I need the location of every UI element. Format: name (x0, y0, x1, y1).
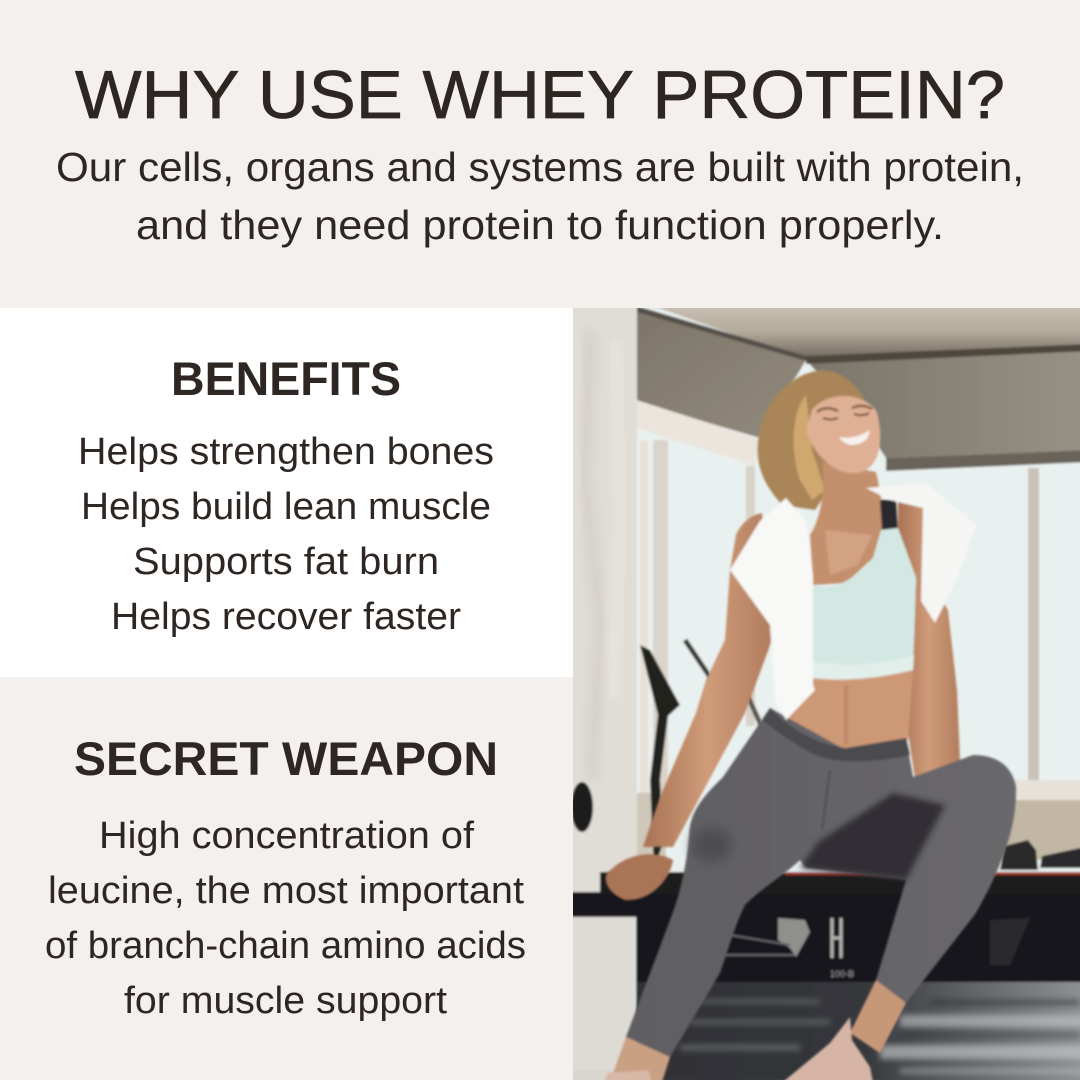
secret weapon description: of branch-chain amino acids (45, 925, 526, 967)
inner thigh shadow (800, 793, 945, 880)
secret weapon description: leucine, the most important (48, 870, 524, 912)
intro text: Our cells, organs and systems are built with protein, (56, 144, 1024, 190)
smile (839, 430, 870, 445)
panel: benefits (0, 308, 573, 677)
hand (606, 854, 673, 900)
waistband (762, 708, 910, 761)
woman (604, 370, 1016, 1080)
sports top (813, 528, 916, 680)
left arm (643, 513, 772, 847)
secret weapon description: for muscle support (124, 980, 447, 1022)
panel: secret weapon (0, 677, 573, 1080)
ankles and shoes (610, 1037, 670, 1080)
left towel (730, 498, 815, 720)
gym machine (640, 645, 680, 870)
gym background (565, 298, 1080, 1080)
face (806, 396, 880, 473)
benefits list (78, 431, 494, 638)
knee shadow (692, 827, 732, 863)
neck and chest (810, 462, 883, 585)
shoulder and right arm (898, 495, 960, 778)
pillar (565, 300, 637, 893)
secret weapon description: High concentration of (99, 815, 474, 857)
photo: woman resting in gym (565, 298, 1080, 1080)
heading: secret weapon: SECRET WEAPON (74, 732, 498, 785)
secret weapon description (45, 815, 526, 1022)
hair (758, 370, 868, 510)
weight plate (571, 782, 593, 832)
midriff (785, 668, 913, 750)
benefits list: Helps strengthen bones (78, 431, 494, 473)
right towel (866, 483, 976, 623)
benefits list: Helps build lean muscle (81, 486, 491, 528)
benefits list: Supports fat burn (133, 541, 439, 583)
leggings (626, 708, 1016, 1057)
benefits list: Helps recover faster (111, 596, 461, 638)
heading: benefits: BENEFITS (171, 352, 401, 405)
intro text (56, 144, 1024, 248)
intro text: and they need protein to function properly. (136, 202, 944, 248)
title: WHY USE WHEY PROTEIN? (75, 57, 1005, 133)
strap (880, 500, 898, 530)
floor (636, 982, 1080, 1080)
machine label: 100-B (830, 969, 854, 979)
bench (636, 913, 1080, 985)
